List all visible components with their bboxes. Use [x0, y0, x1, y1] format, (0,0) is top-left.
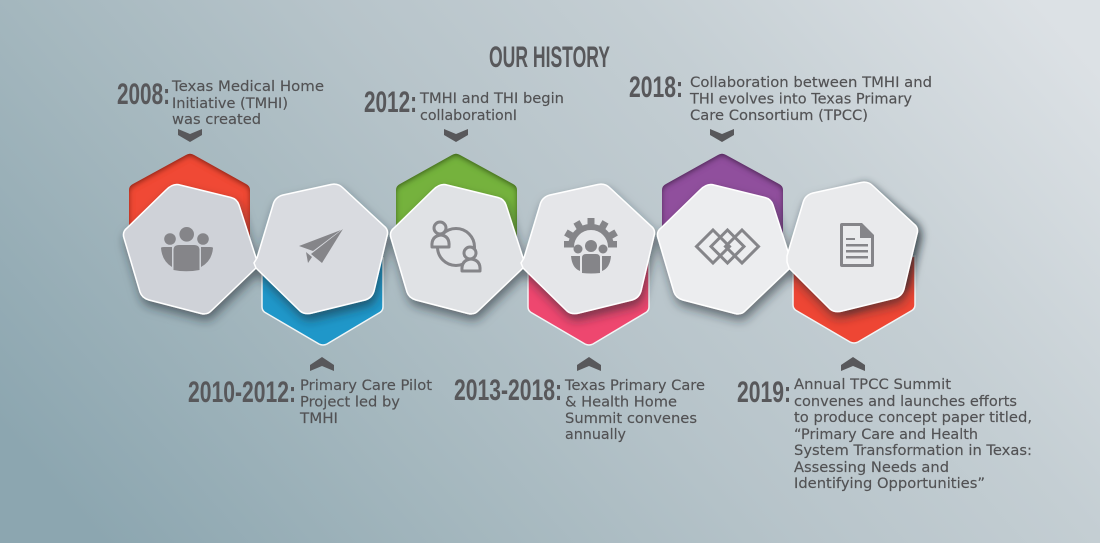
- icon: document: [840, 223, 874, 267]
- milestone 2008 text: was created: [172, 112, 261, 128]
- milestone 2018 text: Collaboration between TMHI and: [690, 75, 932, 91]
- milestone 2013-2018 text: annually: [565, 427, 626, 443]
- milestone 2008 text: 2008:: [117, 78, 170, 111]
- milestone 2019 text: Identifying Opportunities”: [794, 476, 985, 492]
- arrow: chevron 2018: [710, 129, 734, 142]
- milestone 2019 text: Annual TPCC Summit: [794, 377, 952, 393]
- milestone 2010-2012 text: Project led by: [300, 394, 400, 410]
- milestone 2019 text: [737, 376, 1032, 492]
- milestone 2018 text: [629, 71, 932, 124]
- blue tab 2010-2012: [262, 258, 383, 345]
- card 6 side shadow: [792, 182, 922, 311]
- milestone 2010-2012 text: TMHI: [299, 411, 338, 427]
- card 4: [521, 184, 655, 314]
- milestone 2013-2018 text: & Health Home: [565, 394, 677, 410]
- milestone 2019 text: convenes and launches efforts: [794, 394, 1017, 410]
- red tab 2019: [793, 256, 915, 343]
- title: OUR HISTORY: [489, 41, 610, 74]
- icon: people group: [161, 227, 213, 271]
- milestone 2018 text: 2018:: [629, 71, 683, 104]
- milestone 2012 text: collaborationI: [420, 108, 517, 124]
- milestone 2019 text: System Transformation in Texas:: [794, 443, 1032, 459]
- card 6: [787, 182, 918, 312]
- milestone 2019 text: to produce concept paper titled,: [794, 410, 1032, 426]
- milestone 2008 text: Texas Medical Home: [171, 79, 324, 95]
- milestone 2012 text: [364, 86, 564, 124]
- milestone 2010-2012 text: [188, 376, 433, 427]
- milestone 2013-2018 text: [454, 374, 705, 443]
- milestone 2008 text: Initiative (TMHI): [172, 96, 288, 112]
- icon: linked diamonds: [696, 230, 758, 263]
- red tab 2008: [129, 154, 250, 245]
- green tab 2012: [396, 154, 517, 245]
- milestone 2019 text: Assessing Needs and: [794, 460, 949, 476]
- card strip: [123, 182, 918, 314]
- milestone 2010-2012 text: Primary Care Pilot: [300, 378, 433, 394]
- card 3: [390, 185, 525, 314]
- milestone 2008 text: [117, 78, 324, 128]
- icon: paper plane: [299, 229, 343, 263]
- card 2: [254, 184, 388, 314]
- milestone 2019 text: 2019:: [737, 376, 791, 409]
- card 1: [123, 185, 258, 314]
- arrow: chevron 2019: [841, 357, 865, 371]
- pink tab 2013-2018: [528, 258, 649, 345]
- milestone 2013-2018 text: Texas Primary Care: [564, 378, 705, 394]
- milestone 2018 text: Care Consortium (TPCC): [690, 108, 868, 124]
- purple tab 2018: [662, 154, 783, 245]
- card 5: [657, 185, 790, 314]
- arrow: chevron 2012: [444, 129, 468, 142]
- milestone 2018 text: THI evolves into Texas Primary: [689, 92, 912, 108]
- arrow: chevron 2010-2012: [310, 357, 334, 371]
- icon: connected people: [432, 222, 480, 271]
- arrow: chevron 2008: [178, 129, 202, 142]
- milestone 2013-2018 text: Summit convenes: [565, 411, 697, 427]
- milestone 2012 text: TMHI and THI begin: [419, 91, 564, 107]
- arrow: chevron 2013-2018: [577, 357, 601, 371]
- milestone 2019 text: “Primary Care and Health: [794, 427, 978, 443]
- milestone 2013-2018 text: 2013-2018:: [454, 374, 562, 407]
- icon: gear with people: [564, 218, 618, 274]
- milestone 2012 text: 2012:: [364, 86, 417, 119]
- milestone 2010-2012 text: 2010-2012:: [188, 376, 296, 409]
